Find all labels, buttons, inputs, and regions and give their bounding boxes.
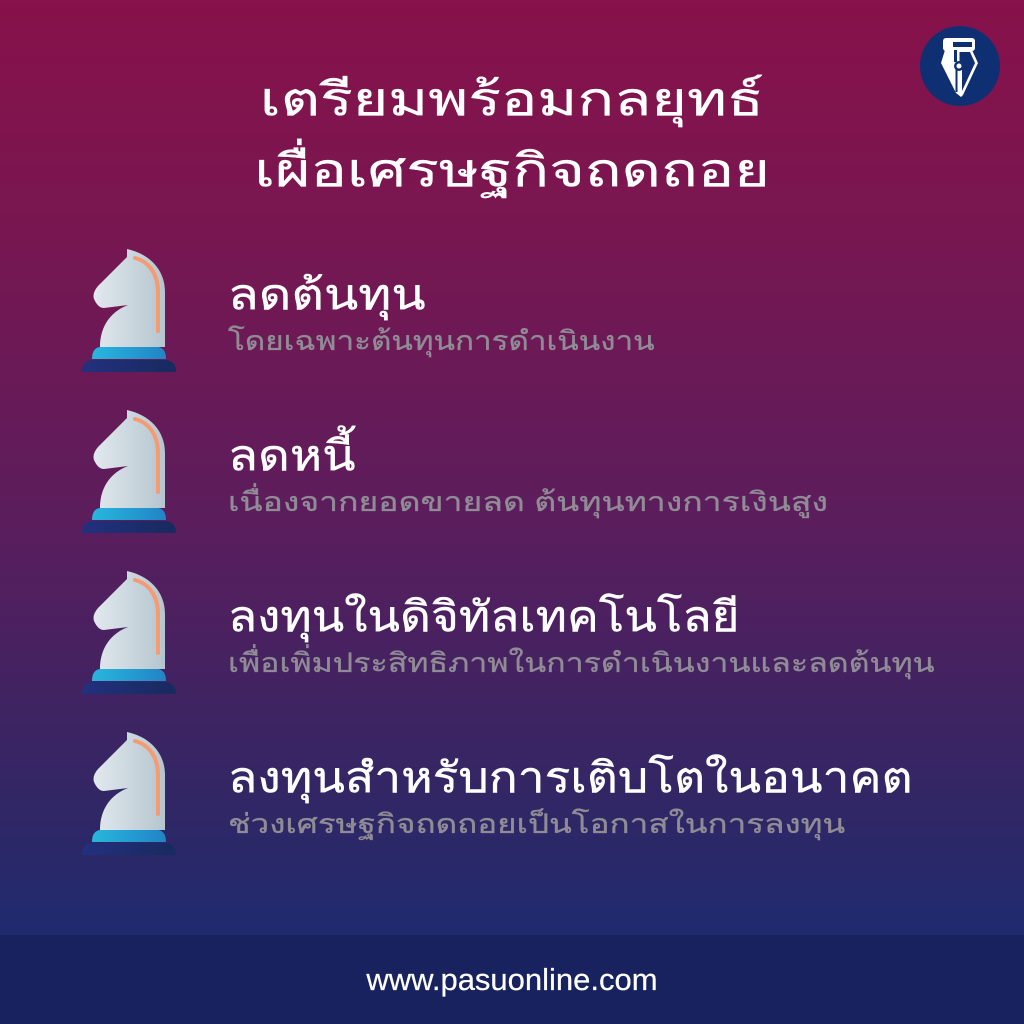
- panel: item 2: [82, 410, 828, 533]
- icon: chess knight: [82, 249, 176, 372]
- description: ช่วงเศรษฐกิจถดถอยเป็นโอกาสในการลงทุน: [228, 809, 845, 839]
- description: โดยเฉพาะต้นทุนการดำเนินงาน: [228, 326, 655, 356]
- description: เพื่อเพิ่มประสิทธิภาพในการดำเนินงานและลดต้นทุน: [228, 648, 935, 678]
- description: เนื่องจากยอดขายลด ต้นทุนทางการเงินสูง: [228, 487, 828, 517]
- title: เตรียมพร้อมกลยุทธ์: [260, 73, 764, 125]
- icon: chess knight: [82, 732, 176, 855]
- title: เผื่อเศรษฐกิจถดถอย: [254, 144, 770, 196]
- icon: chess knight: [82, 571, 176, 694]
- footer bar: www.pasuonline.com: [366, 962, 658, 997]
- heading: ลงทุนในดิจิทัลเทคโนโลยี: [228, 593, 740, 640]
- heading: ลดต้นทุน: [228, 271, 426, 318]
- title: [254, 73, 770, 198]
- panel: item 4: [82, 732, 913, 855]
- icon: chess knight: [82, 410, 176, 533]
- footer bar: [0, 935, 1024, 1024]
- heading: ลดหนี้: [228, 432, 356, 479]
- panel: item 3: [82, 571, 935, 694]
- panel: item 1: [82, 249, 655, 372]
- heading: ลงทุนสำหรับการเติบโตในอนาคต: [228, 754, 913, 801]
- logo: pen nib badge: [920, 26, 1000, 106]
